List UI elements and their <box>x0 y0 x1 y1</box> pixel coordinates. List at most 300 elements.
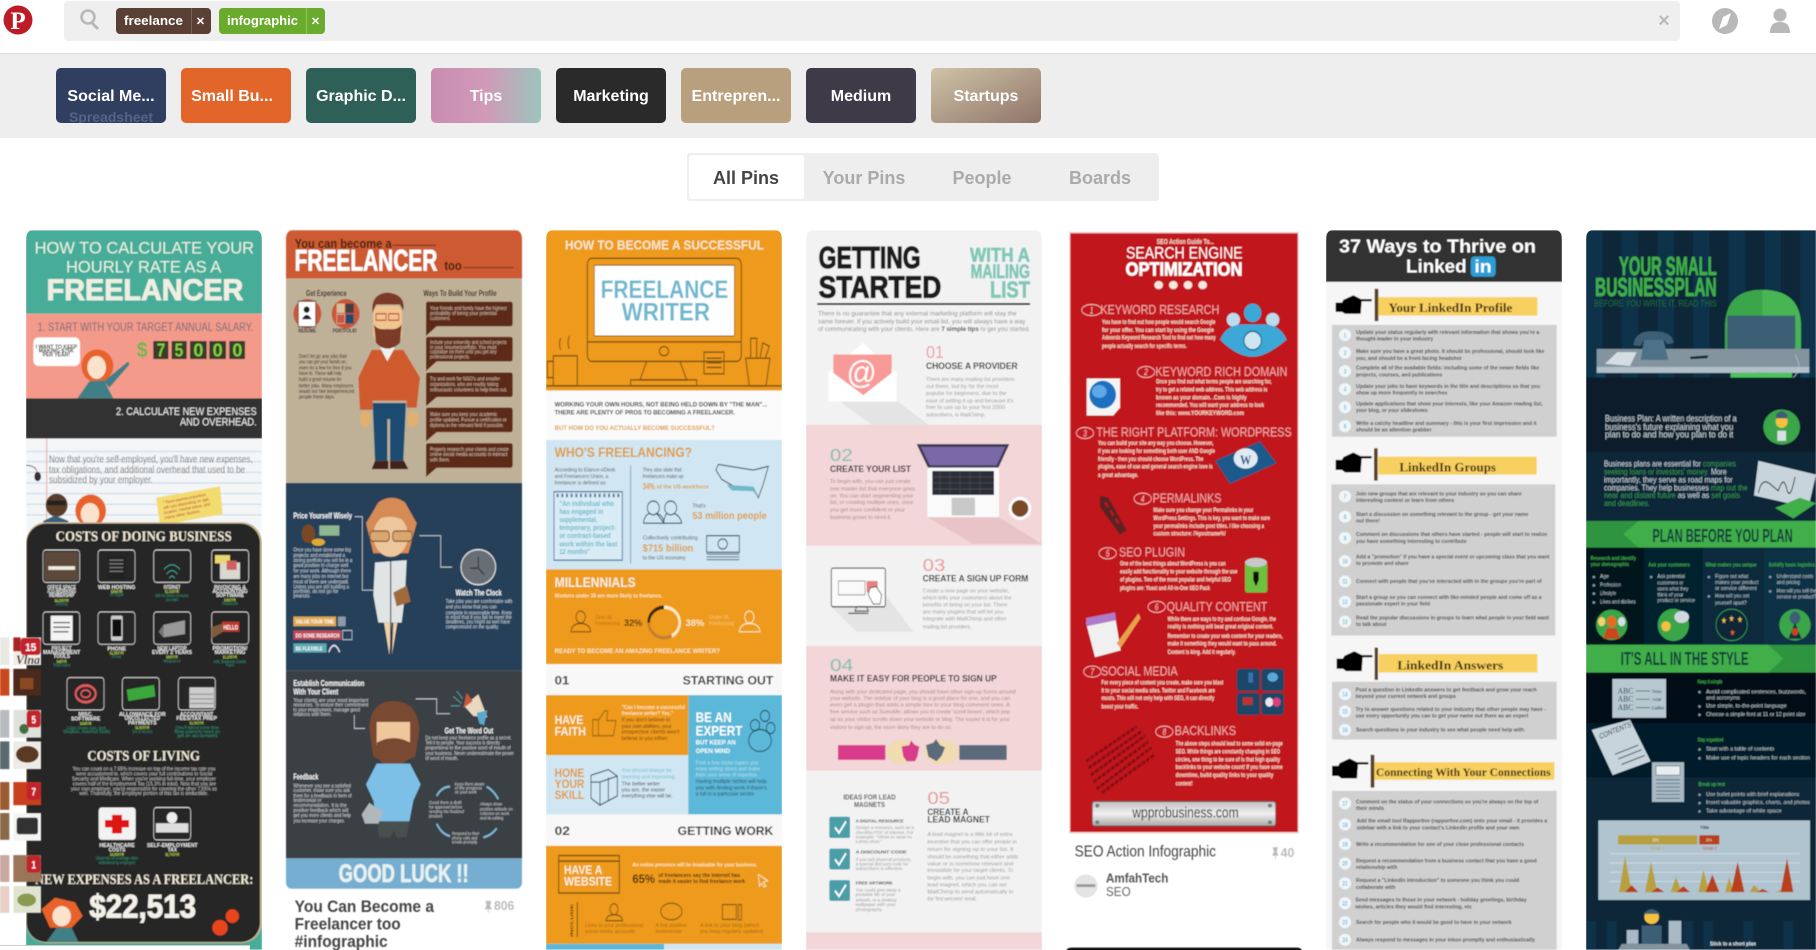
pin 6: 37 ways to thrive on linkedin: in <box>1474 258 1492 277</box>
pin 3: freelance writer: believe in you either. <box>622 735 668 742</box>
thumbnails: board 4 <box>0 855 41 913</box>
pin 3: freelance writer: According to Elance-oDesk <box>555 467 616 474</box>
thumbnails: board 3 <box>0 782 41 841</box>
pin 1: hourly rate freelancer infographic: $45/YR <box>57 659 67 664</box>
pin 1: hourly rate freelancer infographic: PAYMENTS <box>128 720 157 725</box>
pin 5: seo action infographic: musts. This will not only help with SEO, it can directly <box>1101 696 1214 703</box>
pin 4: getting started with a mailing list: incentive that you can offer people in <box>927 839 1017 846</box>
pin 4: getting started with a mailing list: photography. <box>856 906 883 912</box>
pin 2: you can become a freelancer: Ways To Build Your Profile <box>423 290 497 298</box>
pin 5: seo action infographic: Once you find out what terms people are searching for, <box>1156 379 1272 386</box>
pin 4: getting started with a mailing list: CREATE A <box>927 807 969 817</box>
pin 7: small business plan: ★ <box>1721 615 1727 626</box>
icon: compass <box>1712 8 1738 34</box>
pin 3: freelance writer: Under-35 <box>709 614 729 621</box>
pin 1 footer strip <box>0 945 250 950</box>
pin 5: seo action infographic: Adwords Keyword Research Tool to find out how many <box>1102 335 1216 342</box>
pin 2: you can become a freelancer: have to. These will help <box>299 371 342 378</box>
pin 1: hourly rate freelancer infographic: TOOLS <box>53 654 70 659</box>
pin 2: you can become a freelancer: phone calls and <box>452 835 477 841</box>
tile: Tips: Tips <box>470 88 502 105</box>
pin 1: hourly rate freelancer infographic: You can count on a 7.65% increase on top of the income tax rate you <box>73 766 216 772</box>
tabs: Your Pins <box>823 168 905 188</box>
pin 2: you can become a freelancer: Properly research your clients and create <box>430 446 509 453</box>
pin 4: getting started with a mailing list: GETTING <box>819 240 921 275</box>
pin 6: 37 ways to thrive on linkedin: 11 <box>1343 579 1347 586</box>
pin 1: hourly rate freelancer infographic: 5 <box>175 340 183 361</box>
pin 7: small business plan: Age <box>1600 574 1609 580</box>
pin 5: seo action infographic: try to get a related web address. This web address is <box>1156 387 1267 394</box>
pin 6: 37 ways to thrive on linkedin: 15 <box>1342 709 1348 716</box>
pin 5: seo action infographic: SEARCH ENGINE <box>1126 245 1243 263</box>
pin 1: hourly rate freelancer infographic: $360/YR <box>224 598 236 602</box>
tile: Small Business <box>181 68 291 123</box>
pin 3: freelance writer: them your areas of expertise. <box>696 772 758 779</box>
pin 2: you can become a freelancer: proportional to the positive word of mouth of <box>425 745 511 752</box>
pin 1: hourly rate freelancer infographic: PROMOTION/ <box>213 645 248 651</box>
pin 6: 37 ways to thrive on linkedin: 6 <box>1344 424 1346 431</box>
pin 2: you can become a freelancer: Whenever you see a satisfied <box>293 783 351 790</box>
pin 5 caption <box>1074 843 1294 900</box>
pin 6: 37 ways to thrive on linkedin: 5 <box>1344 405 1346 412</box>
pin 7: small business plan: 80% <box>1653 838 1659 843</box>
pin 2: you can become a freelancer: GOOD LUCK !! <box>339 859 469 888</box>
pin 5: seo action infographic: 3 <box>1083 428 1087 439</box>
pin 6: 37 ways to thrive on linkedin: Start a group so you can connect with like-minded people and come off as a <box>1356 594 1542 600</box>
pin 6: 37 ways to thrive on linkedin: Complete all of the available fields: including some of the newer fields like <box>1356 365 1540 371</box>
pin 2: you can become a freelancer: strong portfolio you will be in a <box>293 557 353 564</box>
pin 3: freelance writer: WHO'S FREELANCING? <box>555 444 692 461</box>
pin 6: 37 ways to thrive on linkedin: Update applications that show your interests, like your Amazon reading list, <box>1356 401 1543 406</box>
pin 1: hourly rate freelancer infographic: Flyers <box>226 663 234 668</box>
pin 3: freelance writer: freelancers make up <box>643 473 684 480</box>
pin 1: hourly rate freelancer infographic: Ads, Business Cards, <box>213 659 247 664</box>
pin 5: seo action infographic: 1 <box>1090 305 1094 316</box>
pin 7: small business plan: Use simple, to-the-point language <box>1706 703 1787 710</box>
pin 1: hourly rate freelancer infographic: your own employer, you're responsible for covering the other 7.65% as <box>71 786 218 792</box>
pin 4: getting started with a mailing list: subscribers is effective. <box>856 865 903 871</box>
pin 4: getting started with a mailing list: Along with your dedicated page, you should have other sign-up forms around <box>830 689 1016 696</box>
icon: person <box>1770 8 1790 33</box>
pin 4: getting started with a mailing list: checklist PDF of interest. For <box>856 829 914 835</box>
pin 3: freelance writer: freelance writer? Yes." <box>622 710 673 717</box>
icon: pinterest logo <box>4 6 32 35</box>
pin 7: small business plan: 20% <box>1706 838 1713 843</box>
pin 2: you can become a freelancer: most of them are underpaid. <box>293 579 349 586</box>
pin 2: you can become a freelancer: enthusiastic volunteers to help them out. <box>430 387 507 394</box>
pin 5: seo action infographic: PERMALINKS <box>1153 492 1221 506</box>
icon: pinterest logo: P <box>10 8 26 35</box>
pin 6: 37 ways to thrive on linkedin: sidebar with a link to your contact's LinkedIn profile and your own <box>1357 825 1520 831</box>
pin 6: 37 ways to thrive on linkedin: 12 <box>1342 599 1348 606</box>
pin 5: seo action infographic: easily add functionality to your website through the use <box>1120 569 1237 576</box>
pin 1: hourly rate freelancer infographic: get an accountant) <box>177 734 217 738</box>
pin 3: freelance writer: WEBSITE <box>564 876 612 889</box>
pin 6: 37 ways to thrive on linkedin: 16 <box>1342 728 1348 734</box>
pin 6: 37 ways to thrive on linkedin: Search questions in your industry to see what people need help with <box>1356 727 1524 733</box>
pin 3: freelance writer: An online presence will be invaluable for your business. <box>632 862 758 869</box>
pin 4: getting started with a mailing list: example: "What to wear to <box>856 834 913 840</box>
pin 7: small business plan: How will you set <box>1715 593 1750 600</box>
pin 2: you can become a freelancer: them for a feedback in form of <box>293 793 352 800</box>
pin 6: 37 ways to thrive on linkedin: 18 <box>1342 822 1348 829</box>
pin 1: hourly rate freelancer infographic: MISC. <box>78 711 93 717</box>
pin 3: freelance writer: has engaged in <box>559 509 604 516</box>
pin 4: getting started with a mailing list: Create a new page on your website, <box>923 588 1009 595</box>
pin 3: freelance writer: 65% <box>632 874 656 886</box>
tile: Startups: Startups <box>954 88 1019 105</box>
thumbnails: board 1: Vlna <box>16 654 40 668</box>
pin 1: hourly rate freelancer infographic: NEW EXPENSES AS A FREELANCER: <box>35 872 253 888</box>
pin 7: small business plan: customers or <box>1657 580 1684 587</box>
pin 2: you can become a freelancer: product <box>429 813 443 819</box>
pin 6: 37 ways to thrive on linkedin: Comment on the status of your connections so you're always on the top of <box>1356 799 1539 804</box>
pin 1: hourly rate freelancer infographic: COSTS <box>109 847 125 853</box>
pin 3: freelance writer: Freelancing: <box>709 620 735 627</box>
pin 7: small business plan: ABC <box>1618 702 1633 712</box>
pin 5 caption: 40 <box>1281 847 1294 860</box>
pin 4: getting started with a mailing list: irresistible for your target clients. To <box>927 868 1014 875</box>
pin 2: you can become a freelancer: people these days. <box>299 394 335 401</box>
pin 4: getting started with a mailing list: should be something that either adds <box>927 854 1019 861</box>
pin 1: hourly rate freelancer infographic: filing quarterly taxes so <box>175 730 220 734</box>
pin 2: you can become a freelancer: in mind that if you fail to meet the <box>446 614 512 621</box>
pin 1: hourly rate freelancer infographic: FREELANCER <box>47 275 244 307</box>
thumbnails: board 2 <box>0 710 41 769</box>
pin 7: small business plan: seeking loans or investors' money. More <box>1604 469 1727 477</box>
pin 6: 37 ways to thrive on linkedin: 17 <box>1342 801 1348 808</box>
tile: Social Media: Spreadsheet <box>69 109 153 125</box>
pin 6: 37 ways to thrive on linkedin: Your LinkedIn Profile <box>1388 302 1513 315</box>
pin 7: small business plan: Stick to a short plan <box>1710 941 1756 948</box>
pin 1: hourly rate freelancer infographic: covers half of the Employment Tax (15.3% in total). Now that you are <box>73 781 217 786</box>
pin 3: freelance writer: testimonials <box>656 928 683 934</box>
pin 1: hourly rate freelancer infographic: 0 <box>232 340 242 361</box>
pin 2: you can become a freelancer: Tell it to people. Your success is directly <box>425 740 501 747</box>
pin 7: small business plan: Stay organized <box>1698 737 1723 744</box>
pin 3: freelance writer: you keep regularly updated) <box>700 928 764 934</box>
pin 5: seo action infographic: it to your social media sites. Twitter and Facebook are <box>1101 688 1215 695</box>
pin 2: you can become a freelancer: Get Experience <box>306 290 347 298</box>
pin 2: you can become a freelancer: diploma in the relevant field if possible. <box>430 422 504 429</box>
pin 5: seo action infographic: One of the best things about WordPress is you can <box>1120 561 1226 568</box>
pin 2: you can become a freelancer: resources. To ensure their commitment <box>293 702 369 709</box>
pin 4: getting started with a mailing list: on. You can start segmenting your <box>830 493 914 500</box>
pin 7: small business plan: importantly, they serve as road maps for <box>1604 477 1733 485</box>
pin 3: freelance writer: a lull in a particular sector. <box>696 791 755 798</box>
pin 7: small business plan: Profession <box>1600 582 1621 589</box>
pin 2: you can become a freelancer: compromised on the quality. <box>446 624 499 631</box>
search bar <box>64 1 1680 41</box>
pin 1: hourly rate freelancer infographic: INVOICING & <box>214 584 247 590</box>
pin 7: small business plan: think of your <box>1657 592 1684 599</box>
pin 7: small business plan: PLAN BEFORE YOU PLAN <box>1652 526 1793 547</box>
pin 4: getting started with a mailing list: one master list that everyone goes <box>830 486 916 493</box>
pin 2: you can become a freelancer: online social media accounts to interact <box>430 452 508 458</box>
pin 2 caption <box>295 898 514 950</box>
pin 2: you can become a freelancer: of the progress <box>455 785 482 791</box>
pin 5: seo action infographic: for your offer. You can start by using the Google <box>1102 327 1214 334</box>
pin 2: you can become a freelancer: build a good resume for <box>299 377 342 384</box>
pin 3: freelance writer: you with finding work if there's <box>696 785 767 792</box>
pin 6: 37 ways to thrive on linkedin: LinkedIn Answers <box>1397 659 1503 673</box>
pin 6: 37 ways to thrive on linkedin: relationship with <box>1356 864 1398 870</box>
pin 4: getting started with a mailing list: free to use up to your first 2000 <box>926 404 1005 411</box>
pin 3: freelance writer: The better writer <box>622 781 660 788</box>
pin 5: seo action infographic: You have to find out how people would search Google <box>1102 319 1215 326</box>
pin 1: hourly rate freelancer infographic: PHONE <box>107 646 126 651</box>
pin 2: you can become a freelancer: your business. Never underestimate the power <box>425 750 514 757</box>
pin 2: you can become a freelancer: Get The Word Out <box>445 728 494 736</box>
pin 3: freelance writer: of freelancers say the internet has <box>658 872 740 879</box>
pin 5: seo action infographic: known as your domain. .Com is highly <box>1156 395 1247 402</box>
tile: Medium: Medium <box>831 88 891 105</box>
pin 3: freelance writer: "An individual who <box>559 501 614 508</box>
pin 4: getting started with a mailing list: STARTED <box>819 270 941 304</box>
pin 1: hourly rate freelancer infographic: WEB HOSTING <box>98 584 136 590</box>
pin 3: freelance writer: 53 million people <box>692 510 767 521</box>
pin 6: 37 ways to thrive on linkedin: out there! <box>1356 518 1381 524</box>
pin 4: getting started with a mailing list <box>806 230 1042 950</box>
pin 6: 37 ways to thrive on linkedin: Make sure you have a great photo. It should be professional, should look like <box>1356 348 1545 354</box>
pin 1: hourly rate freelancer infographic: COSTS OF LIVING <box>87 748 200 764</box>
pin 7: small business plan: What makes you unique <box>1705 562 1757 568</box>
pin 3: freelance writer: Over-35 <box>595 614 612 621</box>
pin 1: hourly rate freelancer infographic: subsidized by your employer. <box>49 474 153 485</box>
pin 4: getting started with a mailing list: MAGNETS <box>854 801 886 809</box>
pin 1: hourly rate freelancer infographic: $360/YR <box>111 590 123 594</box>
pin 2: you can become a freelancer: projects and established a <box>293 552 345 559</box>
pin 1: hourly rate freelancer infographic: many other factors. <box>164 509 201 520</box>
pin 5: seo action infographic: 8 <box>1162 727 1167 737</box>
pin 5: seo action infographic: SEO Action Guide To... <box>1157 239 1214 246</box>
pin 1: hourly rate freelancer infographic: NEW LAPTOP <box>157 645 187 651</box>
pin 7: small business plan: yourself apart? <box>1715 600 1747 607</box>
pin 2: you can become a freelancer: Unless you are still building a <box>293 584 349 591</box>
pin 5: seo action infographic: like this: www.YOURKEYWORD.com <box>1156 410 1244 417</box>
pin 4: getting started with a mailing list: list, or creating multiple ones, once <box>830 500 914 507</box>
pin 6: 37 ways to thrive on linkedin: Post a question in LinkedIn answers to get feedback and grow your reach <box>1356 687 1537 693</box>
pin 1: hourly rate freelancer infographic: Trello/Asana <box>53 663 70 668</box>
pin 6: 37 ways to thrive on linkedin: interesting content or learn from others <box>1356 497 1455 503</box>
pin 6: 37 ways to thrive on linkedin: you have something interesting to contribute <box>1356 538 1467 544</box>
pin 3: freelance writer: If you don't believe in <box>622 717 670 724</box>
pin 4: getting started with a mailing list: a special discount code for <box>856 861 909 866</box>
pin 3: freelance writer: HONE <box>555 768 584 780</box>
pin 6: 37 ways to thrive on linkedin: your blog, or your slideshows <box>1356 407 1428 413</box>
pin 4: getting started with a mailing list: 03 <box>923 556 945 575</box>
search bar: infographic <box>227 13 298 28</box>
pin 4: getting started with a mailing list: free service such as SumoMe, allows you to create 'scroll boxes', which pop <box>830 709 1010 716</box>
tile: Entrepreneur: Entrepren... <box>692 88 780 105</box>
pin 5: seo action infographic: plugins are: Yoast and All-in-One SEO Pack <box>1120 586 1211 593</box>
pin 1: hourly rate freelancer infographic: MacBook Air <box>164 659 181 663</box>
pin 2: you can become a freelancer: recommendation. It is the <box>293 802 347 809</box>
pin 5: seo action infographic: You can build your site any way you choose. However, <box>1098 440 1214 447</box>
pin 4: getting started with a mailing list: A lead magnet is a little bit of extra <box>927 832 1013 838</box>
pin 5: seo action infographic: KEYWORD RICH DOMAIN <box>1155 366 1287 380</box>
pin 6: 37 ways to thrive on linkedin: 22 <box>1342 901 1348 908</box>
pin 4: getting started with a mailing list: CHOOSE A PROVIDER <box>926 361 1018 372</box>
search bar: × <box>196 12 205 28</box>
pin 6: 37 ways to thrive on linkedin <box>1326 230 1562 950</box>
pin 1: hourly rate freelancer infographic: (You'll spend some time <box>176 725 219 730</box>
pin 7: small business plan: ★ <box>1729 614 1735 624</box>
tile: Graphic Design: Graphic D... <box>316 88 406 105</box>
pin 3: freelance writer: your own abilities, your <box>622 723 672 730</box>
pin 7: small business plan: service or product? <box>1777 594 1816 601</box>
pin 7: small business plan: Insert valuable graphics, charts, and photos <box>1706 800 1811 807</box>
pin 4: getting started with a mailing list: There is no guarantee that any external marketing platform will stay the <box>818 311 1017 318</box>
pin 4: getting started with a mailing list: subscribers, is MailChimp. <box>926 412 986 419</box>
pin 6: 37 ways to thrive on linkedin: Write a recommendation for one of your close professional contacts <box>1356 841 1524 847</box>
search bar: × <box>311 12 320 28</box>
pin 7: small business plan: BUSINESSPLAN <box>1595 273 1717 302</box>
pin 4: getting started with a mailing list: value or is somehow relevant and <box>927 861 1014 868</box>
pin 3: freelance writer: and Freelancers Union, a <box>555 473 609 480</box>
pin 1: hourly rate freelancer infographic: HOURLY RATE AS A <box>66 259 222 277</box>
pin 4: getting started with a mailing list: CREATE YOUR LIST <box>830 464 911 474</box>
pin 2: you can become a freelancer: even do a few for free if you <box>299 365 352 372</box>
pin 2: you can become a freelancer: BE FLEXIBLE <box>296 646 323 653</box>
pin 6: 37 ways to thrive on linkedin: 23 <box>1342 920 1348 927</box>
pin 5: seo action infographic: content! <box>1176 781 1193 788</box>
tile: Social Media <box>56 68 166 125</box>
pin 5: seo action infographic: THE RIGHT PLATFORM: WORDPRESS <box>1096 426 1292 440</box>
pin 1: hourly rate freelancer infographic: $348/YR <box>80 722 92 726</box>
pin 5: seo action infographic: SEO. While things are constantly changing in SEO <box>1176 749 1280 756</box>
pin 5: seo action infographic: friendly - then you should choose WordPress. The <box>1098 456 1203 463</box>
pin 5: seo action infographic: 4 <box>1141 494 1145 504</box>
pin 5: seo action infographic: plugins, ease of use and general search engine love is <box>1098 464 1213 471</box>
pin 6: 37 ways to thrive on linkedin: 37 Ways to Thrive on <box>1339 236 1536 257</box>
pin 2: you can become a freelancer: good position to charge well <box>293 563 348 569</box>
pin 7: small business plan: ABC <box>1618 694 1633 704</box>
pin 2: you can become a freelancer: Respond to their <box>452 830 480 836</box>
pin 2: you can become a freelancer: for approval before <box>429 804 463 810</box>
pin 1: hourly rate freelancer infographic: $1,700/YR <box>165 853 180 857</box>
pin 7: small business plan: your demographic <box>1591 562 1630 567</box>
pin 2: you can become a freelancer: of word of mouth. <box>425 755 458 762</box>
pin 2: you can become a freelancer: VALUE YOUR TIME <box>296 619 335 626</box>
pin 3: freelance writer: you are, the easier <box>622 787 665 794</box>
pin 1: hourly rate freelancer infographic: were accustomed to, which covers your full contributions to Social <box>76 771 212 777</box>
pin 5: seo action infographic: Make sure you change your Permalinks in your <box>1153 507 1254 514</box>
pin 2: you can become a freelancer: RESUME <box>298 328 317 335</box>
pin 5: seo action infographic: boost your traffic. <box>1101 704 1139 711</box>
pin 2: you can become a freelancer: in your resume/portfolio. You must <box>430 344 497 351</box>
thumbnails: board 4: 1 <box>31 859 36 872</box>
pin 2: you can become a freelancer: and its editing <box>480 815 503 821</box>
pin 6: 37 ways to thrive on linkedin: 20 <box>1342 861 1348 868</box>
pin 7: small business plan: Title <box>1700 825 1710 830</box>
pin 6: 37 ways to thrive on linkedin: Join new groups that are relevant to your industry so you can share <box>1356 491 1522 497</box>
pin 2: you can become a freelancer: Feedback <box>293 774 318 782</box>
pin 6: 37 ways to thrive on linkedin: Start a discussion on something relevant to the group - get your name <box>1356 512 1529 517</box>
pin 3: freelance writer: EXPERT <box>696 723 743 739</box>
pin 2: you can become a freelancer: emails promptly <box>452 839 477 845</box>
pin 7: small business plan: ★ <box>1730 627 1736 638</box>
pin 4: getting started with a mailing list: begin with, you can just have one <box>927 875 1010 882</box>
pin 7: small business plan: Research and identify <box>1591 556 1637 561</box>
pin 2: you can become a freelancer: and you know that you can <box>446 604 497 611</box>
pin 1: hourly rate freelancer infographic: SOFTWARE <box>216 593 244 598</box>
pin 3: freelance writer: prospective clients won't <box>622 729 680 736</box>
pin 2: you can become a freelancer: professional projects. <box>430 354 470 361</box>
pin 6: 37 ways to thrive on linkedin: 7 <box>1344 494 1346 501</box>
pin 2: you can become a freelancer: With Your Client <box>293 689 339 697</box>
pin 7: small business plan: business's future explaining what you <box>1605 422 1733 432</box>
pin 4: getting started with a mailing list: lead magnet, which you can set <box>927 882 1007 889</box>
pin 4: getting started with a mailing list: are many plugins that will let you <box>923 609 1004 616</box>
pin 4: getting started with a mailing list: out there, but by far the most <box>926 384 999 390</box>
pin 6: 37 ways to thrive on linkedin: 24 <box>1342 937 1348 944</box>
pin 1: hourly rate freelancer infographic: you want <box>166 597 178 602</box>
pin 5: seo action infographic <box>1067 232 1302 950</box>
pin 3: freelance writer: BUT KEEP AN <box>696 740 736 747</box>
pin 4: getting started with a mailing list: artwork, or a desktop <box>856 897 897 902</box>
pin 7: small business plan: Group 2 <box>1702 846 1717 851</box>
tile: Medium <box>806 68 916 123</box>
pin 2: you can become a freelancer: FREELANCER <box>295 245 438 277</box>
pin 2: you can become a freelancer: are many jobs on internet but <box>293 574 349 580</box>
pin 2: you can become a freelancer: PORTFOLIO <box>333 328 357 335</box>
pin 3: freelance writer: everything else will be. <box>622 793 673 800</box>
pin 1: hourly rate freelancer infographic: MANAGEMENT <box>43 649 81 655</box>
pin 7: small business plan: Arial <box>1652 697 1661 702</box>
pin 1: hourly rate freelancer infographic: $22,513 <box>89 888 196 924</box>
pin 3: freelance writer: 32% <box>624 618 642 628</box>
pin 2: you can become a freelancer: You can become a <box>295 238 392 252</box>
pin 7: small business plan: or service different <box>1715 586 1757 593</box>
pin 1: hourly rate freelancer infographic: MEMBERSHIP <box>49 593 74 598</box>
pin 1: hourly rate freelancer infographic: Freshbooks <box>222 602 238 606</box>
pin 3: freelance writer: HAVE A <box>564 865 603 878</box>
pin 1: hourly rate freelancer infographic: AND OVERHEAD. <box>180 416 257 428</box>
pin 1: hourly rate freelancer infographic: 2. CALCULATE NEW EXPENSES <box>116 406 257 417</box>
pin 6: 37 ways to thrive on linkedin: passionate expert in your field <box>1356 601 1430 607</box>
pin 4: getting started with a mailing list: the 'first welcome' email. <box>927 896 977 903</box>
pin 2: you can become a freelancer: positive attitude on <box>480 806 513 811</box>
pin 2: you can become a freelancer: would not hire inexperienced <box>299 388 354 395</box>
pin 1: hourly rate freelancer infographic: location, marital status, and <box>164 502 210 515</box>
pin 3: freelance writer: YOUR <box>555 779 585 792</box>
pin 7: small business plan: Calibri <box>1652 705 1664 711</box>
pin 6: 37 ways to thrive on linkedin: LinkedIn Groups <box>1399 461 1496 475</box>
board thumbnails popup <box>0 637 41 913</box>
pin 7: small business plan: companies. They help businesses map out the <box>1604 485 1748 493</box>
pin 6: 37 ways to thrive on linkedin: Request a recommendation from a business contact that you have a good <box>1356 858 1537 864</box>
pin 1: hourly rate freelancer infographic: MAKING $75K <box>39 348 75 354</box>
pin 3: freelance writer: or contract-based <box>559 533 611 540</box>
pin 1: hourly rate freelancer infographic: ACCOUNTING <box>212 588 248 594</box>
pin 7: small business plan: near and distant future as well as set goals <box>1604 492 1741 501</box>
pin 1: hourly rate freelancer infographic <box>26 230 262 950</box>
pin 6: 37 ways to thrive on linkedin: 3 <box>1344 369 1346 376</box>
pin 4: getting started with a mailing list: even get a plugin that adds a simple box to your blog comment ones. A <box>830 702 1011 709</box>
pin 5 caption: AmfahTech <box>1106 872 1168 886</box>
pin 2: you can become a freelancer: to your employment, manage good <box>293 707 360 714</box>
pin 2: you can become a freelancer: Good them a draft <box>429 800 463 805</box>
pin 5: seo action infographic: While there are ways to try and confuse Google, the <box>1168 617 1276 623</box>
pin 2: you can become a freelancer: capitalize on them until you get any <box>430 349 497 356</box>
pin 1: hourly rate freelancer infographic: $ <box>137 338 148 362</box>
pin 3: freelance writer: 01 <box>555 675 570 688</box>
pin 2: you can become a freelancer: organizations, who are readily taking <box>430 381 499 388</box>
pin 5: seo action infographic: your permalinks include post titles. I like choosing a <box>1153 523 1265 530</box>
pin 4: getting started with a mailing list: You could give away a <box>856 887 902 893</box>
pin 1: hourly rate freelancer infographic: OFFICE SPACE <box>47 584 76 590</box>
